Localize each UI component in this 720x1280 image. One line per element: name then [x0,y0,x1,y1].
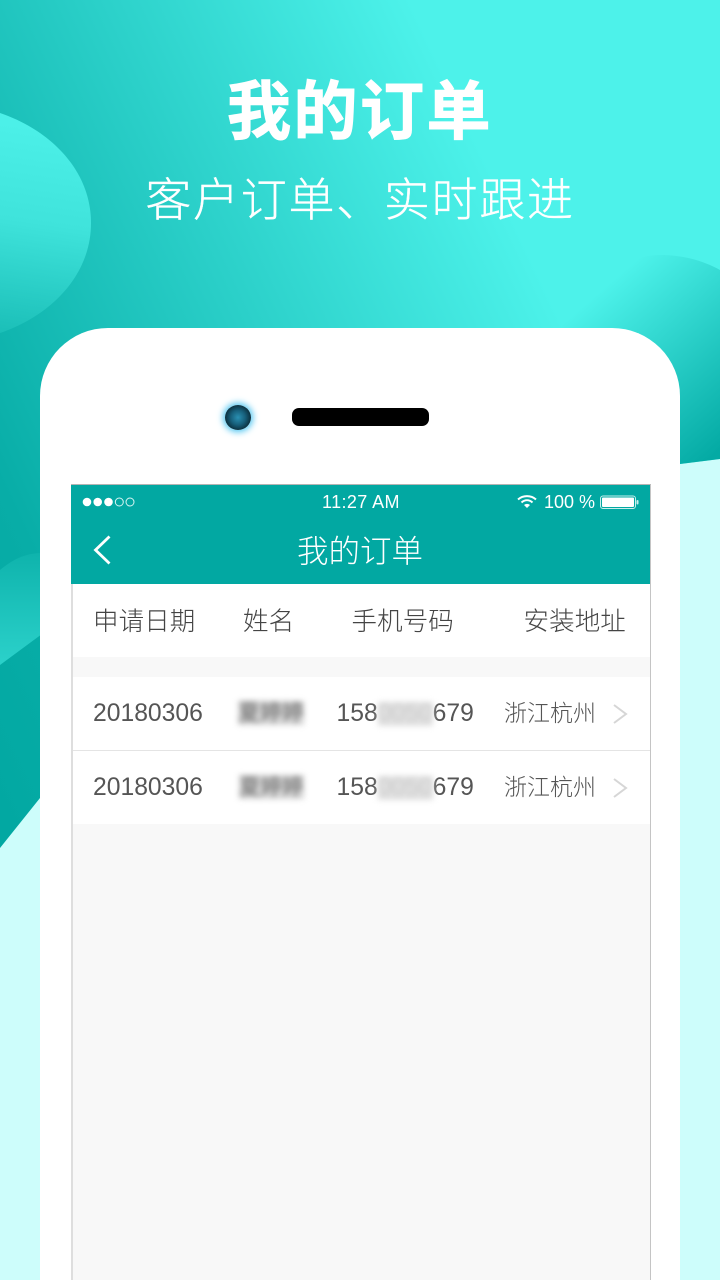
screen left edge [71,584,72,1280]
phone body [40,328,680,1280]
screen border [71,484,651,1280]
date: 20180306 [93,774,203,801]
battery percent: 100 % [544,492,595,512]
phone: 0050 [378,700,433,727]
order row 1 [71,677,650,751]
nav title: 我的订单 [297,533,423,569]
blurred name: 夏婷婷 [238,700,304,725]
column: name: 姓名 [243,608,294,636]
phone: 158 679 [336,700,474,727]
icon: speaker [292,408,429,426]
column: date: 申请日期 [93,608,195,636]
address: 浙江杭州 [504,700,596,726]
date: 20180306 [93,700,203,727]
column: phone: 手机号码 [352,608,454,636]
app screen [71,485,650,1280]
chevron [614,778,628,798]
subtitle: 客户订单、实时跟进 [145,174,575,226]
icon: wifi [517,495,537,508]
blurred name: 夏婷婷 [239,775,304,799]
phone: 158 679 [336,774,474,801]
icon: camera [225,405,251,430]
status signal [82,498,134,506]
icon: battery [600,496,638,509]
title: 我的订单 [227,76,493,148]
nav back arrow [94,536,110,564]
table header [71,584,650,657]
phone: 0050 [378,774,433,801]
app header [71,485,650,584]
chevron [614,704,628,724]
order row 2 [71,751,650,824]
address: 浙江杭州 [504,774,596,800]
column: address: 安装地址 [524,608,626,636]
status time: 11:27 AM [322,492,400,512]
